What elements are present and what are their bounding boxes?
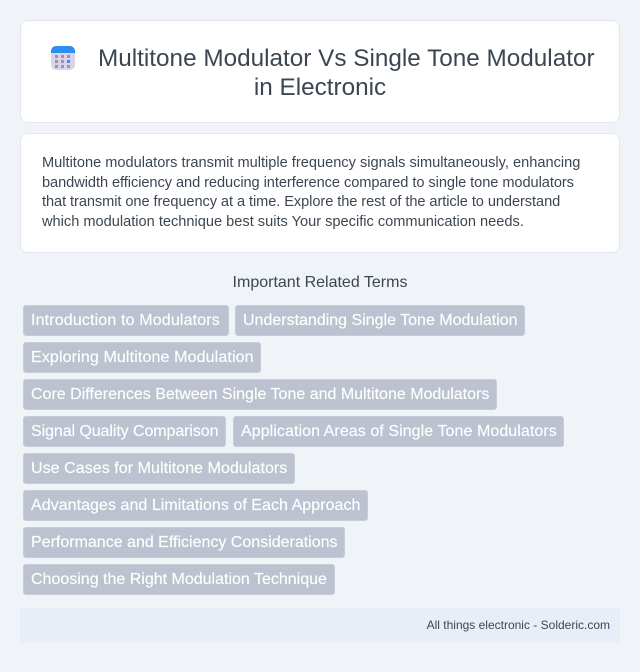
header panel <box>20 20 620 123</box>
chip <box>23 416 226 447</box>
footer credit: All things electronic - Solderic.com <box>427 618 610 632</box>
chip: Choosing the Right Modulation Technique <box>31 571 327 588</box>
chip <box>23 305 229 336</box>
heading: related terms: Important Related Terms <box>233 274 407 291</box>
chip <box>23 527 345 558</box>
title <box>98 45 595 101</box>
title: in Electronic <box>254 74 386 101</box>
chip <box>23 342 261 373</box>
footer bar <box>20 608 620 642</box>
chip <box>23 564 335 595</box>
chip <box>23 453 295 484</box>
description text: which modulation technique best suits Your specific communication needs. <box>42 214 524 230</box>
chip: Introduction to Modulators <box>31 312 220 329</box>
panel: term chips <box>23 305 564 595</box>
chip <box>23 490 368 521</box>
title: Multitone Modulator Vs Single Tone Modulator <box>98 45 595 72</box>
chip: Core Differences Between Single Tone and Multitone Modulators <box>31 386 489 403</box>
description text: bandwidth efficiency and reducing interference compared to single tone modulators <box>42 175 574 191</box>
chip: Advantages and Limitations of Each Approach <box>31 497 360 514</box>
description text <box>42 155 580 230</box>
icon: calendar <box>51 46 75 70</box>
panel: description <box>20 133 620 253</box>
chip: Exploring Multitone Modulation <box>31 349 254 366</box>
chip: Understanding Single Tone Modulation <box>243 312 518 329</box>
chip <box>235 305 525 336</box>
description text: Multitone modulators transmit multiple frequency signals simultaneously, enhancing <box>42 155 580 171</box>
description text: that transmit one frequency at a time. Explore the rest of the article to understand <box>42 194 560 210</box>
chip <box>23 379 497 410</box>
chip: Signal Quality Comparison <box>31 423 218 440</box>
chip: Use Cases for Multitone Modulators <box>31 460 287 477</box>
chip <box>233 416 564 447</box>
chip: Application Areas of Single Tone Modulators <box>241 423 557 440</box>
chip: Performance and Efficiency Considerations <box>31 534 338 551</box>
